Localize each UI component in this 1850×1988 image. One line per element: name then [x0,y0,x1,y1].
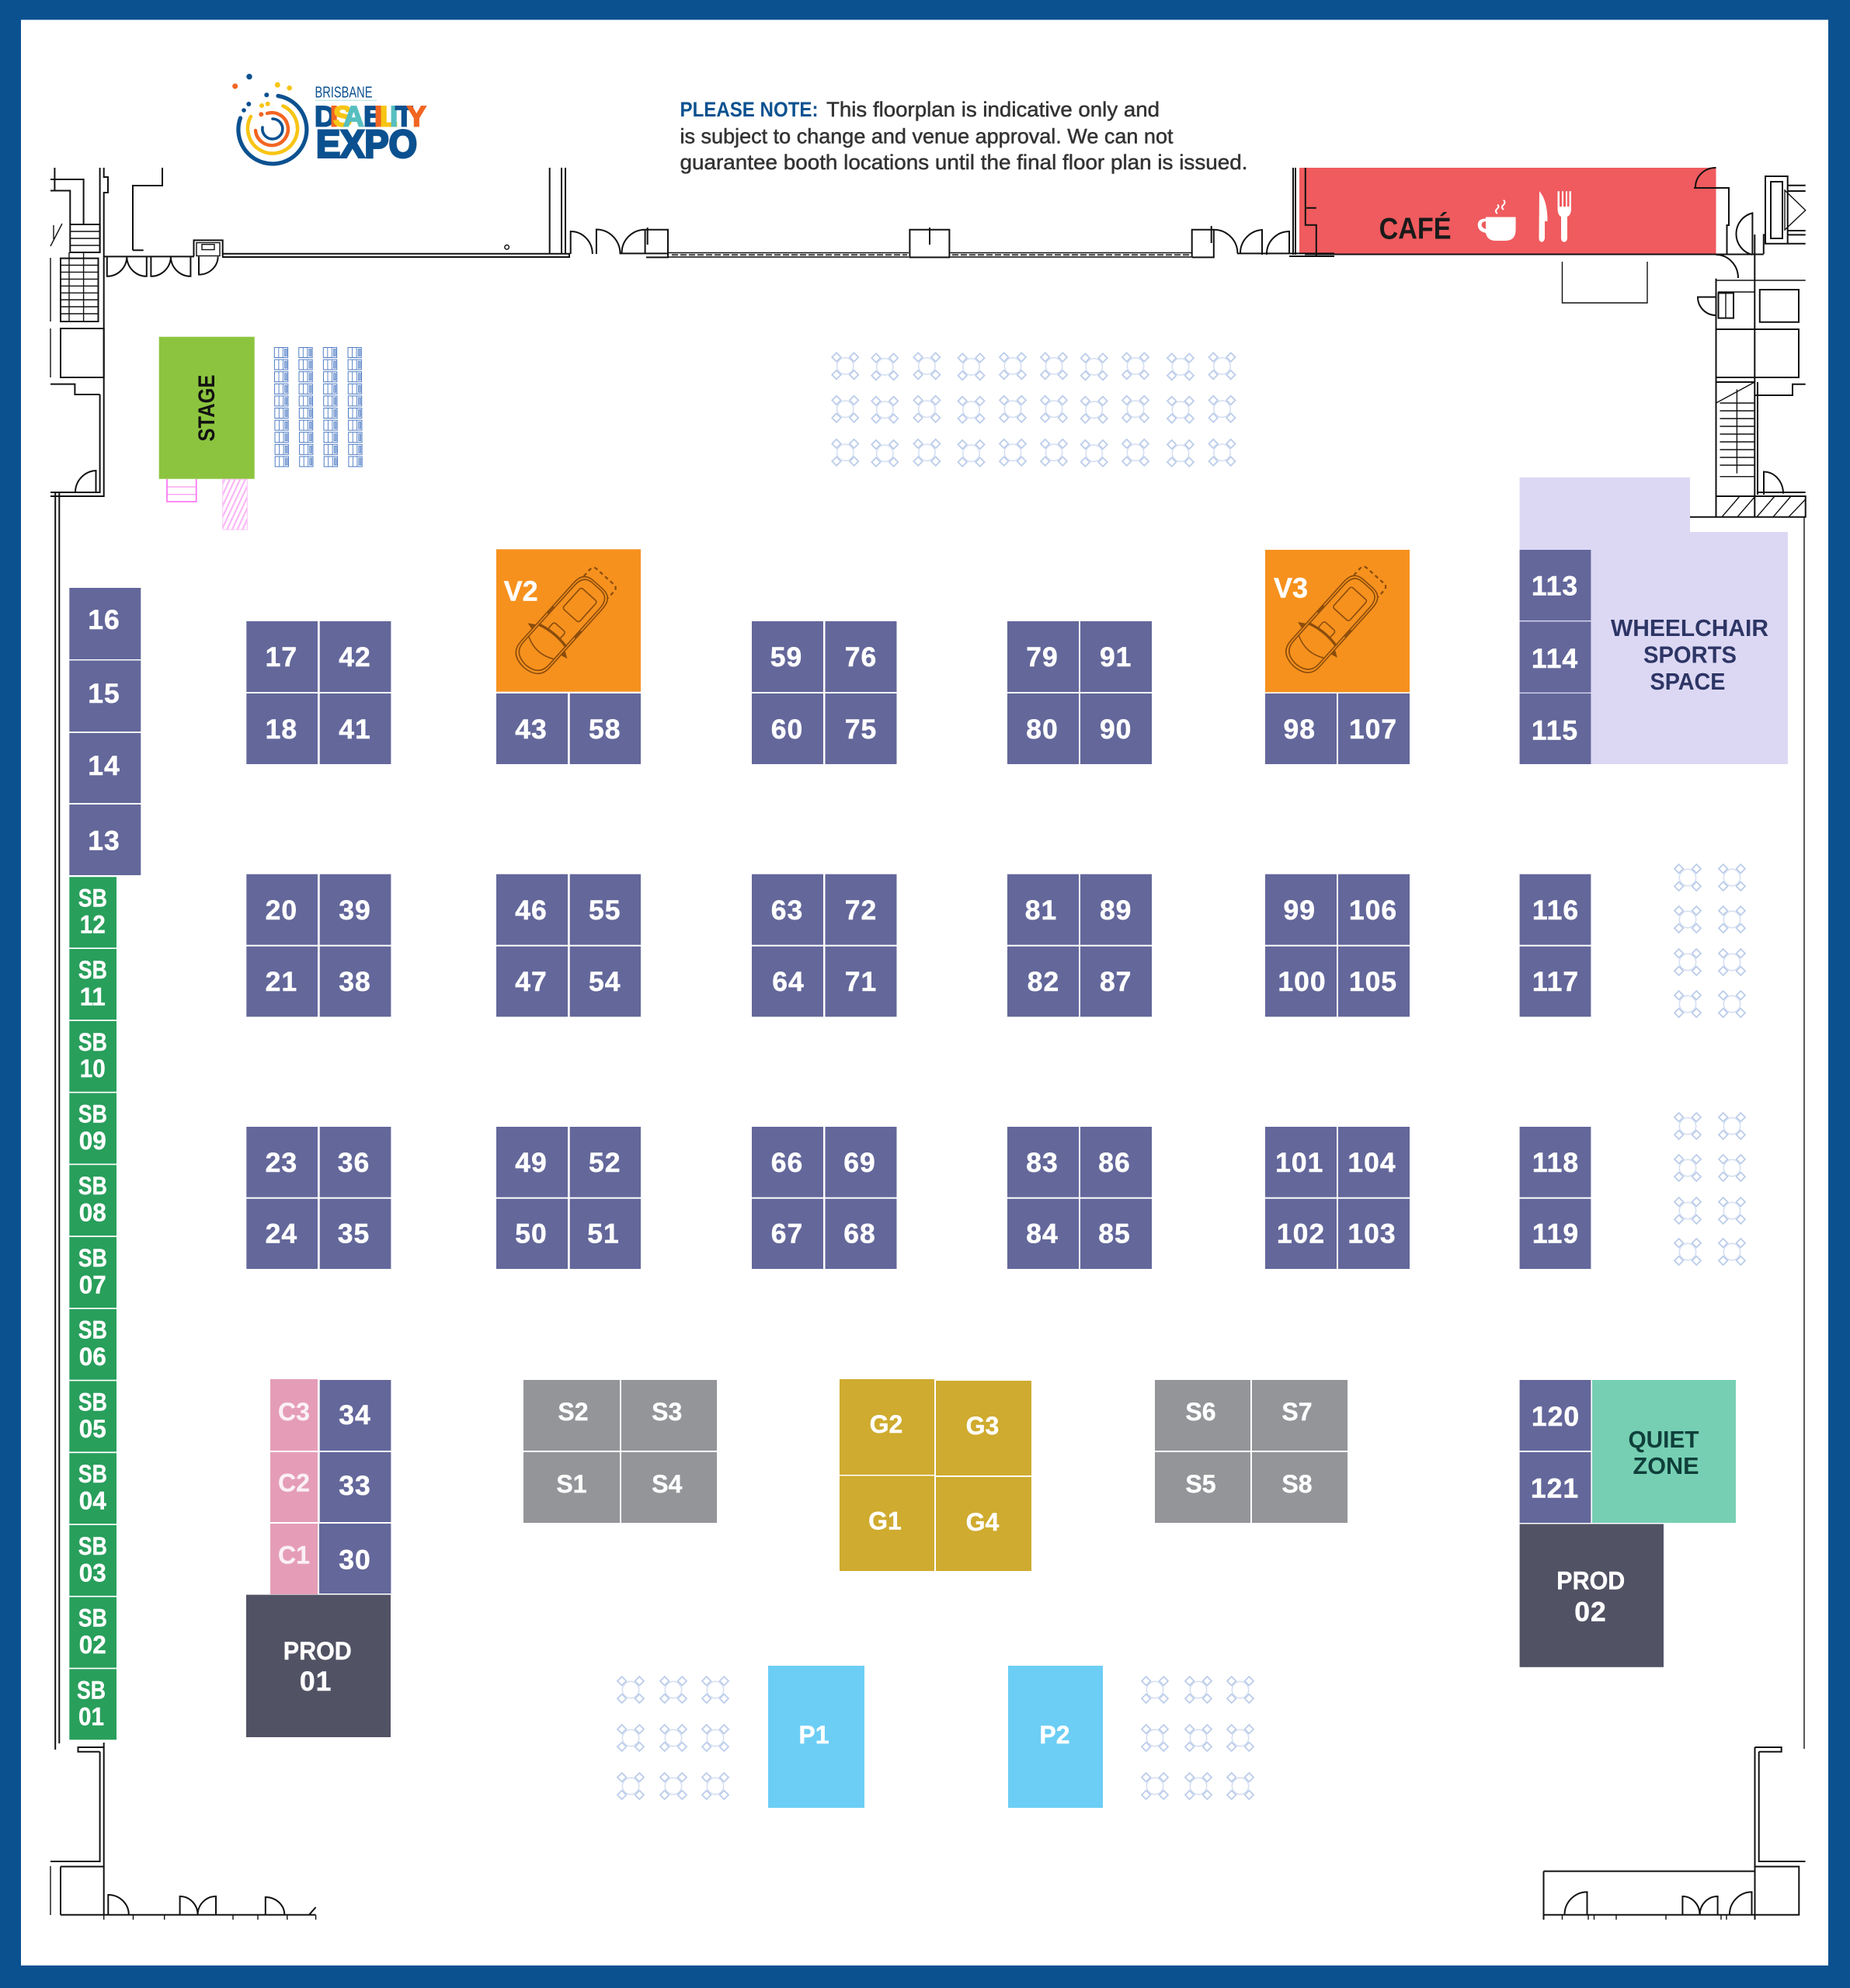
walls: top right corner and stairs [1305,168,1806,517]
booth 16 [69,588,141,659]
booth SB 03: SB [78,1532,107,1560]
booth 49: 49 [515,1147,548,1178]
label: stage: STAGE [194,374,220,441]
booth block 17 18 41 42 [246,621,391,764]
booth SB 06: 06 [79,1343,106,1371]
booth block 83 84 85 86 [1007,1127,1152,1269]
booth 41 [320,693,391,764]
booth 52 [570,1127,641,1197]
booth 69 [825,1127,896,1197]
panel: vehicle display V3 [1265,550,1410,692]
booth 98 [1265,693,1337,764]
sponsor booths: SB column [69,877,116,1740]
booth G2 [840,1379,934,1475]
booth 34 [320,1380,391,1451]
booth S6: S6 [1185,1398,1216,1426]
booth 23: 23 [266,1147,297,1178]
booth block 43 58 [496,693,641,764]
booth 67 [752,1199,823,1269]
label: wheelchair sports space: SPORTS [1643,641,1737,668]
booth 68: 68 [843,1218,876,1249]
booth 105 [1338,947,1410,1017]
booth 86: 86 [1098,1147,1131,1178]
booth SB 07 [69,1237,116,1308]
booth 72 [825,874,896,945]
booth 75 [825,693,896,764]
booth 121: 121 [1531,1473,1579,1504]
booth 100 [1265,947,1337,1017]
booth 79: 79 [1026,641,1059,673]
panel: PROD 02: 02 [1574,1597,1607,1628]
booth 39 [320,874,391,945]
booth S7 [1252,1380,1348,1451]
panel: PROD 01: PROD [283,1637,352,1665]
panel: P2: P2 [1039,1721,1070,1749]
tables: right side upper [1674,864,1745,1017]
booth 107 [1338,693,1410,764]
booth C1: C1 [278,1541,310,1569]
booth 63 [752,874,823,945]
booth 115: 115 [1532,714,1578,746]
booth 20: 20 [266,895,297,926]
booth C2: C2 [278,1469,310,1497]
logo word: Disability: B [363,101,384,132]
booth 49 [496,1127,568,1197]
booth 114 [1520,621,1591,693]
booth SB 09: 09 [79,1127,106,1155]
booth 117: 117 [1532,966,1579,997]
booth block 113 114 115 [1520,550,1591,764]
booth 54: 54 [589,966,621,997]
booth 91 [1080,621,1152,692]
booth 46 [496,874,568,945]
booth 13 [69,805,141,875]
icon: coffee cup [1478,200,1516,241]
booth SB 09 [69,1093,116,1163]
booth G1: G1 [868,1507,902,1534]
booth 35 [320,1199,391,1269]
booth 89 [1080,874,1152,945]
booth G3: G3 [966,1412,999,1440]
booth 38 [320,947,391,1017]
booth SB 05 [69,1381,116,1451]
booth S2 [523,1380,620,1451]
walls: bottom right corner [1544,1747,1805,1920]
booth 43 [496,693,568,764]
booth S2: S2 [558,1398,589,1426]
booth 36 [320,1127,391,1197]
panel: P1 [768,1666,864,1808]
note: floorplan disclaimer [680,98,1247,174]
booth SB 05: 05 [79,1415,106,1443]
booth 101: 101 [1275,1147,1323,1178]
booth S1 [523,1452,620,1523]
logo underline [315,99,377,101]
booth 14: 14 [88,750,120,781]
booth 41: 41 [339,714,371,745]
booth 60 [752,693,823,764]
booth 30 [319,1524,391,1594]
panel: PROD 02: PROD [1556,1566,1625,1594]
panel: P1: P1 [798,1721,829,1749]
booth block 116 117 [1520,874,1591,1017]
booth 91: 91 [1100,641,1132,673]
panel: PROD 01: 01 [300,1666,332,1697]
booth 38: 38 [339,966,371,997]
booth 102: 102 [1277,1218,1325,1249]
tables: lower right of P2 [1142,1677,1254,1799]
booth 99: 99 [1284,895,1316,926]
panel: PROD 01 [246,1595,391,1737]
booth block 98 107 [1265,693,1410,764]
booth 113: 113 [1532,571,1578,602]
booth 69: 69 [843,1147,876,1178]
note: floorplan disclaimer: This floorplan is indicative only and [826,98,1160,121]
note: floorplan disclaimer: is subject to change and venue approval. We can not [680,124,1174,148]
booth 90: 90 [1100,714,1132,745]
booth SB 01: 01 [78,1702,104,1730]
booth 83: 83 [1026,1147,1059,1178]
label: wheelchair sports space: WHEELCHAIR [1611,614,1768,641]
panel: quiet zone [1592,1380,1736,1523]
panel: P2 [1008,1666,1103,1808]
booth 71: 71 [845,966,877,997]
label: V2: V2 [504,575,538,606]
booth block 59 60 75 76 [752,621,896,764]
panel: wheelchair sports space [1520,478,1788,764]
booth 116: 116 [1532,895,1579,926]
booth S3 [621,1380,717,1451]
icon: spiral logo mark [232,74,307,164]
booth SB 08 [69,1165,116,1236]
booth S6 [1155,1380,1250,1451]
booth C2 [270,1452,318,1522]
booth 52: 52 [589,1147,621,1178]
booth 87: 87 [1100,966,1132,997]
booth 54 [570,947,641,1017]
booth 66: 66 [771,1147,803,1178]
booth 106 [1338,874,1410,945]
booth block 101 102 103 104 [1265,1127,1410,1269]
walls: bottom left corner [50,1743,316,1920]
walls: top centre with glazing [222,168,1334,257]
booth block 99 100 105 106 [1265,874,1410,1017]
logo word: Disability: T [395,101,413,132]
booth G1 [840,1475,934,1571]
booth SB 03 [69,1525,116,1596]
booth block 66 67 68 69 [752,1127,896,1269]
booth 99 [1265,874,1337,945]
label: V3: V3 [1274,572,1308,603]
booth SB 12 [69,877,116,947]
booth block 120 121 [1520,1380,1591,1523]
booth SB 10 [69,1021,116,1092]
icon: car [1274,558,1394,683]
booth SB 01 [69,1669,116,1740]
walls: left and right long walls [55,492,1804,1750]
booth G4: G4 [966,1508,1000,1536]
panel: cafe [1299,168,1716,253]
booth 86 [1080,1127,1152,1197]
booth SB 11: SB [78,956,107,984]
booth 121 [1520,1452,1591,1523]
booth SB 12: SB [78,884,107,912]
booth 24: 24 [266,1218,297,1249]
booth block 81 82 87 89 [1007,874,1152,1017]
booth S7: S7 [1281,1398,1313,1426]
booth 119: 119 [1532,1218,1579,1249]
booth 85: 85 [1098,1218,1131,1249]
logo: Brisbane Disability Expo [232,74,426,166]
booth 36: 36 [338,1147,370,1178]
booth block 118 119 [1520,1127,1591,1269]
booth block 23 24 35 36 [246,1127,391,1269]
logo word: Disability: I [330,101,338,132]
booth 100: 100 [1278,966,1327,997]
tables: right side lower [1674,1113,1745,1265]
booth SB 04: 04 [79,1487,106,1515]
panel: vehicle display V2 [496,549,641,692]
booth SB 11 [69,949,116,1020]
booth block S5 to S8 [1155,1380,1348,1523]
booth 47: 47 [515,966,548,997]
booth block S1 to S4 [523,1380,717,1523]
booth 50: 50 [515,1218,548,1249]
logo word: Disability: I [390,101,398,132]
booth SB 10: SB [78,1028,107,1056]
booth 103 [1338,1199,1410,1269]
booth 119 [1520,1199,1591,1269]
booth 118: 118 [1532,1147,1579,1178]
booth S1: S1 [556,1470,587,1498]
booth 82: 82 [1028,966,1059,997]
booth 113 [1520,550,1591,620]
icon: knife and fork [1539,191,1571,242]
booth 76 [825,621,896,692]
booth 104: 104 [1348,1147,1396,1178]
booth 66 [752,1127,823,1197]
booth 75: 75 [845,714,877,745]
booth SB 02: 02 [79,1631,106,1659]
booth 101 [1265,1127,1337,1197]
booth 50 [496,1199,568,1269]
panel: quiet zone: ZONE [1633,1452,1699,1479]
logo word: Disability: L [380,101,398,132]
booth S5 [1155,1452,1250,1523]
booth 84 [1007,1199,1079,1269]
panel: PROD 02 [1520,1524,1664,1667]
walls: top left corner [50,168,223,496]
booth 42: 42 [339,641,371,673]
tables: top lounge [832,353,1235,467]
booth 117 [1520,947,1591,1017]
booth SB 06 [69,1309,116,1380]
logo word: Disability: Y [407,101,426,132]
booth 33 [320,1452,391,1522]
booth 23 [246,1127,318,1197]
label: wheelchair sports space: SPACE [1650,668,1726,695]
booth 89: 89 [1100,895,1132,926]
booths: left wall 13-16 [69,588,141,875]
logo word: Brisbane: BRISBANE [315,84,373,101]
booth 68 [825,1199,896,1269]
booth G4 [936,1477,1031,1571]
booth SB 08: 08 [79,1199,106,1227]
note: floorplan disclaimer: PLEASE NOTE: [680,98,819,121]
booth 103: 103 [1348,1218,1396,1249]
booth 120 [1520,1380,1591,1451]
booth C3 [270,1379,318,1451]
booth 42 [320,621,391,692]
booth 55 [570,874,641,945]
booth 81 [1007,874,1079,945]
booth SB 01: SB [77,1676,106,1704]
booth 59: 59 [770,641,802,673]
logo word: Disability: A [343,101,364,132]
booth 17: 17 [266,641,297,673]
booth G2: G2 [870,1410,902,1438]
booth 67: 67 [771,1218,803,1249]
booth 80: 80 [1026,714,1059,745]
booth 46: 46 [515,895,548,926]
booth 58 [570,693,641,764]
logo word: Disability: D [315,101,336,132]
booth 83 [1007,1127,1079,1197]
stage steps [167,479,196,502]
booth 15: 15 [88,678,120,709]
booth 104 [1338,1127,1410,1197]
booth 105: 105 [1349,966,1397,997]
booth SB 03: 03 [79,1559,106,1587]
booth SB 02: SB [78,1604,107,1632]
booth 35: 35 [338,1218,370,1249]
panel: stage [159,337,255,479]
booth 17 [246,621,318,692]
booth block 46 47 54 55 [496,874,641,1017]
booth 16: 16 [88,604,120,635]
booth 76: 76 [845,641,877,673]
booth 21: 21 [266,966,297,997]
booth S4: S4 [652,1470,682,1498]
booth 14 [69,733,141,803]
booth 21 [246,947,318,1017]
booth 39: 39 [339,895,371,926]
booth block C1 to C3 and 30 33 34 [270,1379,391,1594]
panel: quiet zone: QUIET [1628,1426,1699,1453]
note: floorplan disclaimer: guarantee booth locations until the final floor plan is issued. [680,151,1247,174]
icon: car [505,560,624,684]
booth 102 [1265,1199,1337,1269]
booth 64 [752,947,823,1017]
stage ramp [223,479,247,530]
label: wheelchair sports space [1611,614,1768,695]
booth block 49 50 51 52 [496,1127,641,1269]
booth 63: 63 [771,895,803,926]
tables: lower left of P1 [617,1677,729,1799]
booth SB 06: SB [78,1316,107,1344]
booth 98: 98 [1284,714,1316,745]
booth 116 [1520,874,1591,945]
label: cafe: CAFÉ [1379,212,1452,246]
booth 87 [1080,947,1152,1017]
booth 18 [246,693,318,764]
booth 24 [246,1199,318,1269]
booth 34: 34 [339,1399,371,1430]
booth S5: S5 [1185,1470,1216,1498]
booth S8 [1252,1452,1348,1523]
booth SB 11: 11 [80,982,106,1010]
booth SB 04 [69,1453,116,1524]
booth 18: 18 [266,714,297,745]
booth 114: 114 [1532,643,1578,674]
booth 60: 60 [771,714,803,745]
booth 58: 58 [589,714,621,745]
booth S4 [621,1452,717,1523]
booth 33: 33 [339,1470,371,1501]
booth 51 [570,1199,641,1269]
booth 20 [246,874,318,945]
booth SB 10: 10 [80,1055,106,1083]
booth block 20 21 38 39 [246,874,391,1017]
booth 55: 55 [589,895,621,926]
booth 90 [1080,693,1152,764]
booth 81: 81 [1025,895,1057,926]
booth SB 02 [69,1597,116,1668]
booth 79 [1007,621,1079,692]
booth 51: 51 [587,1218,620,1249]
booth SB 05: SB [78,1388,107,1416]
seating rows [274,348,362,467]
booth 47 [496,947,568,1017]
logo word: Disability: I [374,101,382,132]
booth 107: 107 [1349,714,1397,745]
booth block G1 to G4 [840,1379,1031,1571]
booth C3: C3 [278,1398,310,1426]
booth G3 [936,1381,1031,1475]
booth 82 [1007,947,1079,1017]
booth 72: 72 [845,895,877,926]
booth 30: 30 [339,1544,371,1575]
booth 43: 43 [515,714,548,745]
booth 80 [1007,693,1079,764]
booth 118 [1520,1127,1591,1197]
booth 15 [69,660,141,732]
booth SB 07: SB [78,1244,107,1272]
booth SB 12: 12 [80,911,106,939]
booth 13: 13 [88,825,120,856]
logo word: Disability: S [333,101,353,132]
booth block 63 64 71 72 [752,874,896,1017]
booth S8: S8 [1281,1470,1313,1498]
logo word: Expo: EXPO [316,123,417,166]
booth 59 [752,621,823,692]
booth SB 09: SB [78,1100,107,1128]
booth S3: S3 [652,1398,682,1426]
booth 85 [1080,1199,1152,1269]
booth 84: 84 [1026,1218,1059,1249]
booth 120: 120 [1532,1401,1580,1432]
booth SB 04: SB [78,1460,107,1488]
booth 64: 64 [772,966,805,997]
booth 71 [825,947,896,1017]
booth 115 [1520,693,1591,764]
booth SB 07: 07 [79,1270,106,1298]
booth SB 08: SB [78,1172,107,1200]
booth block 79 80 90 91 [1007,621,1152,764]
booth C1 [270,1524,318,1594]
booth 106: 106 [1349,895,1397,926]
